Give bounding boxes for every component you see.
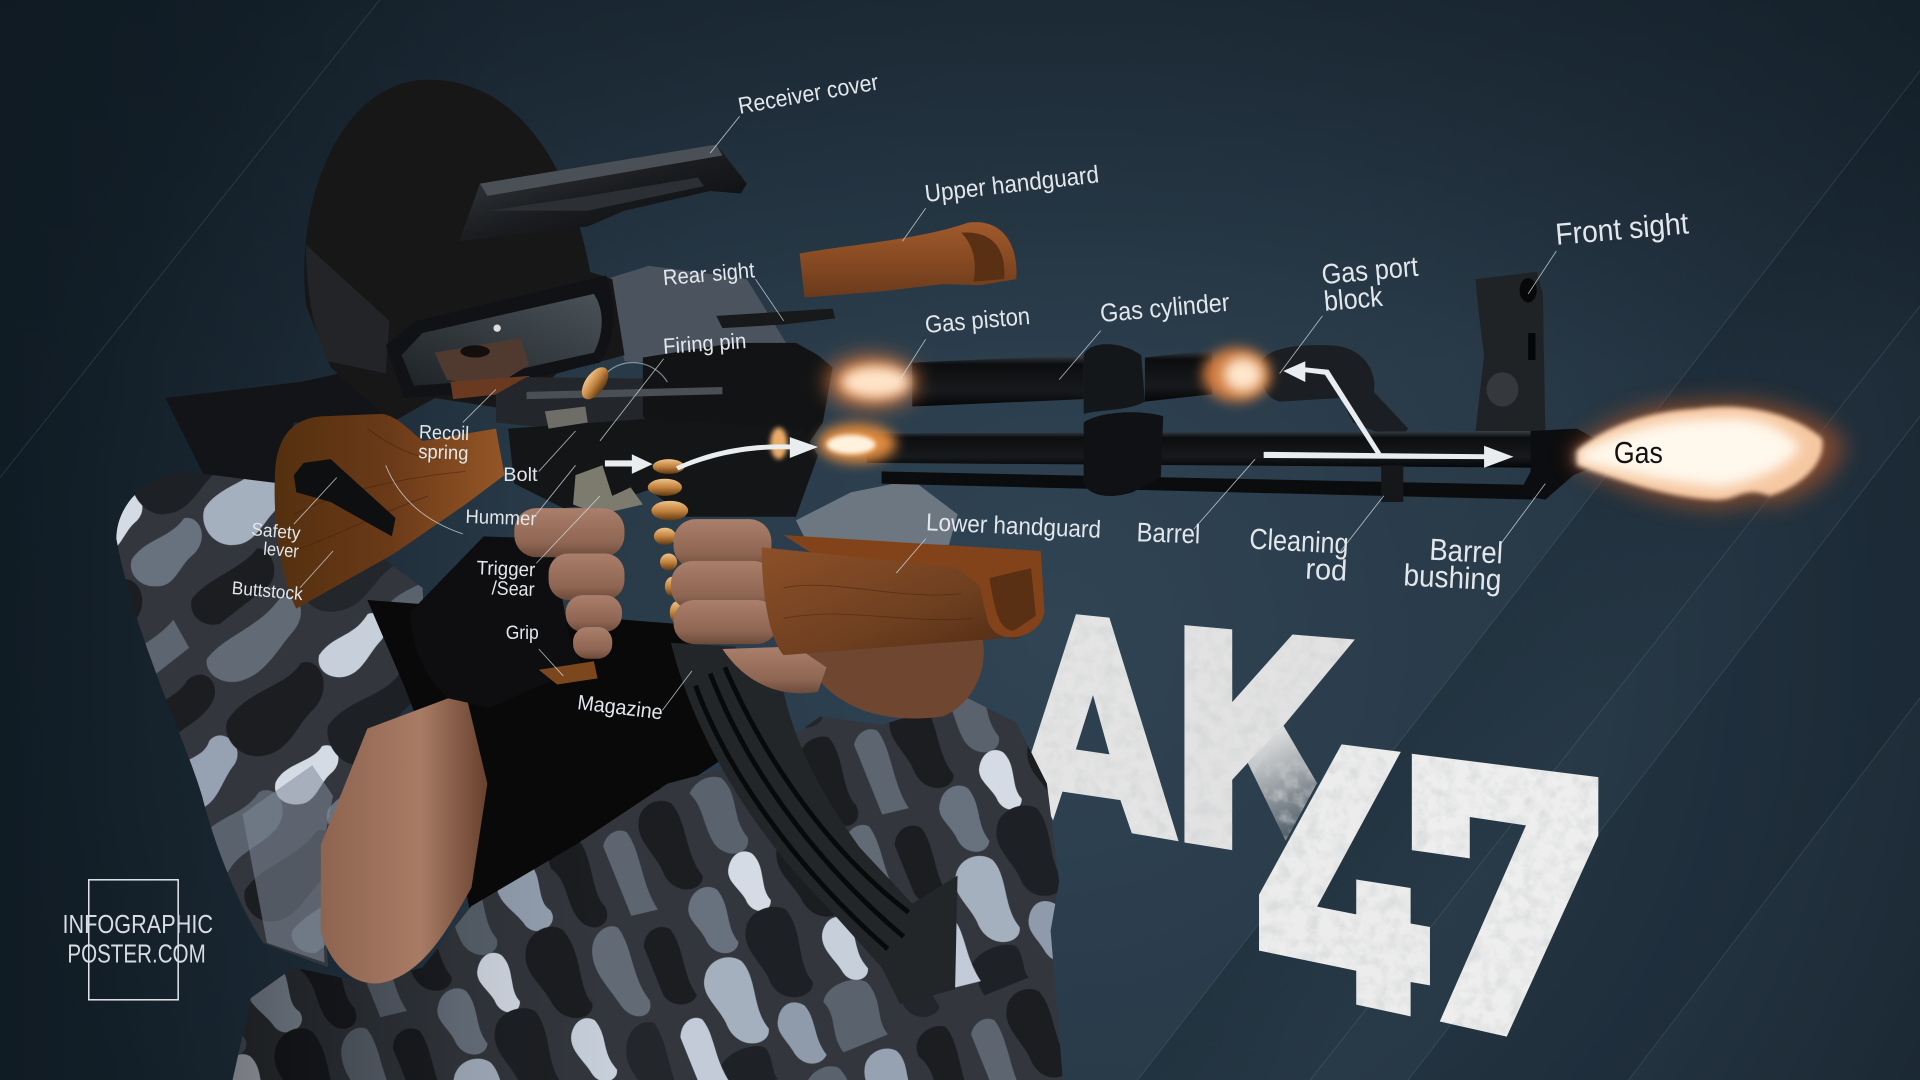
cleaning rod bbox=[882, 471, 1533, 500]
muzzle bbox=[1518, 429, 1594, 500]
label: safety lever: Safety bbox=[251, 518, 302, 543]
arrow: bullet gas to chamber bbox=[676, 437, 818, 470]
label: magazine: Magazine bbox=[576, 691, 664, 724]
label: bolt: Bolt bbox=[503, 464, 538, 486]
eye bbox=[460, 345, 490, 358]
safety lever bbox=[294, 459, 396, 536]
arrow: to gas port bbox=[1283, 361, 1381, 454]
lower receiver bbox=[508, 419, 818, 517]
label: barrel: Barrel bbox=[1136, 517, 1201, 549]
hood mesh bbox=[306, 245, 389, 373]
arrow: small bbox=[605, 454, 653, 474]
gas flash: barrel rear bbox=[770, 424, 896, 463]
barrel ring bbox=[1084, 412, 1163, 496]
glove bbox=[410, 536, 582, 708]
label: gas port block: Gas port bbox=[1320, 251, 1419, 290]
label: gas cylinder: Gas cylinder bbox=[1099, 289, 1231, 328]
label: lower handguard: Lower handguard bbox=[925, 509, 1102, 544]
gas flash: piston bbox=[828, 358, 916, 407]
bolt face highlight bbox=[545, 407, 588, 429]
lens speck bbox=[493, 324, 501, 332]
label: recoil spring: spring bbox=[418, 441, 469, 465]
label: gas piston: Gas piston bbox=[924, 303, 1031, 339]
label: gas port block bbox=[1320, 251, 1422, 317]
labels bbox=[231, 68, 1690, 724]
label: receiver cover: Receiver cover bbox=[736, 68, 881, 119]
front sight bbox=[1476, 272, 1545, 431]
label: cleaning rod: Cleaning bbox=[1249, 523, 1349, 561]
black shirt bbox=[367, 600, 722, 918]
magazine rounds bbox=[648, 459, 688, 623]
label: safety lever: lever bbox=[262, 538, 300, 562]
sleeve near handguard bbox=[796, 480, 958, 545]
label: trigger sear bbox=[475, 557, 536, 601]
gas flash: port bbox=[1202, 348, 1271, 402]
label: cleaning rod bbox=[1247, 523, 1349, 588]
vest straps and mesh bbox=[165, 367, 398, 496]
forearm bbox=[321, 692, 487, 983]
trousers bbox=[233, 698, 1063, 1080]
arrow: barrel to muzzle bbox=[1264, 446, 1513, 468]
grip wood bbox=[539, 661, 598, 684]
tube collar bbox=[1084, 344, 1145, 414]
trigger hand fingers bbox=[514, 508, 624, 557]
label: rear sight: Rear sight bbox=[662, 257, 756, 290]
label: recoil spring bbox=[418, 421, 470, 465]
logo bbox=[62, 880, 213, 1000]
firing smoke bbox=[606, 363, 667, 382]
soldier bbox=[116, 80, 1063, 1080]
logo: POSTER.COM bbox=[67, 940, 206, 968]
bolt carrier bbox=[496, 377, 722, 435]
gas port block bbox=[1261, 345, 1408, 441]
label: front sight: Front sight bbox=[1554, 206, 1690, 252]
gas tube bbox=[912, 355, 1084, 407]
cylinder rear bbox=[1145, 350, 1212, 402]
label: recoil spring: Recoil bbox=[419, 421, 470, 445]
barrel and rod bbox=[867, 412, 1545, 502]
label: grip: Grip bbox=[506, 622, 539, 644]
hands bbox=[410, 508, 827, 708]
trouser shading bbox=[233, 845, 612, 1080]
magazine bbox=[671, 643, 958, 1004]
label: buttstock: Buttstock bbox=[231, 577, 304, 604]
logo: INFOGRAPHIC bbox=[62, 911, 213, 939]
support hand fingers bbox=[673, 519, 771, 568]
barrel bbox=[867, 431, 1545, 468]
label: safety lever bbox=[249, 518, 302, 562]
receiver group bbox=[451, 309, 835, 623]
lower handguard bbox=[762, 535, 1044, 655]
goggles bbox=[386, 276, 613, 398]
label: firing pin: Firing pin bbox=[662, 328, 747, 359]
label: barrel bushing bbox=[1403, 531, 1504, 597]
label: hummer: Hummer bbox=[465, 506, 537, 530]
gas flow arrows bbox=[605, 361, 1513, 474]
jacket bbox=[116, 471, 429, 967]
title: AK 47 bbox=[1016, 606, 1616, 1047]
face bbox=[435, 338, 529, 389]
rod clamp bbox=[1381, 465, 1403, 502]
shoulder behind goggles bbox=[606, 266, 790, 367]
upper block bbox=[643, 343, 833, 453]
hood bbox=[304, 80, 624, 422]
sleeve highlight bbox=[242, 765, 333, 962]
receiver cover bbox=[459, 144, 747, 241]
recoil spring bbox=[451, 376, 531, 399]
goggle glass bbox=[402, 294, 602, 386]
forearm behind handguard bbox=[784, 637, 984, 718]
muzzle flame bbox=[1573, 400, 1844, 509]
label: trigger sear: Trigger bbox=[476, 557, 536, 581]
leader lines bbox=[294, 116, 1556, 710]
ejected round bbox=[577, 363, 614, 404]
carrier highlight bbox=[527, 387, 722, 399]
label: trigger sear: /Sear bbox=[491, 577, 535, 601]
label: gas port block: block bbox=[1323, 281, 1385, 317]
rear sight bbox=[716, 309, 835, 328]
label: upper handguard: Upper handguard bbox=[923, 161, 1100, 208]
buttstock bbox=[275, 414, 504, 609]
label: barrel bushing: Barrel bbox=[1429, 533, 1504, 570]
label: barrel bushing: bushing bbox=[1403, 558, 1502, 597]
gas cylinder bbox=[912, 344, 1212, 414]
label: cleaning rod: rod bbox=[1305, 553, 1348, 588]
upper handguard bbox=[800, 222, 1017, 298]
label: gas: Gas bbox=[1614, 436, 1663, 470]
trigger mechanism bbox=[573, 465, 643, 514]
